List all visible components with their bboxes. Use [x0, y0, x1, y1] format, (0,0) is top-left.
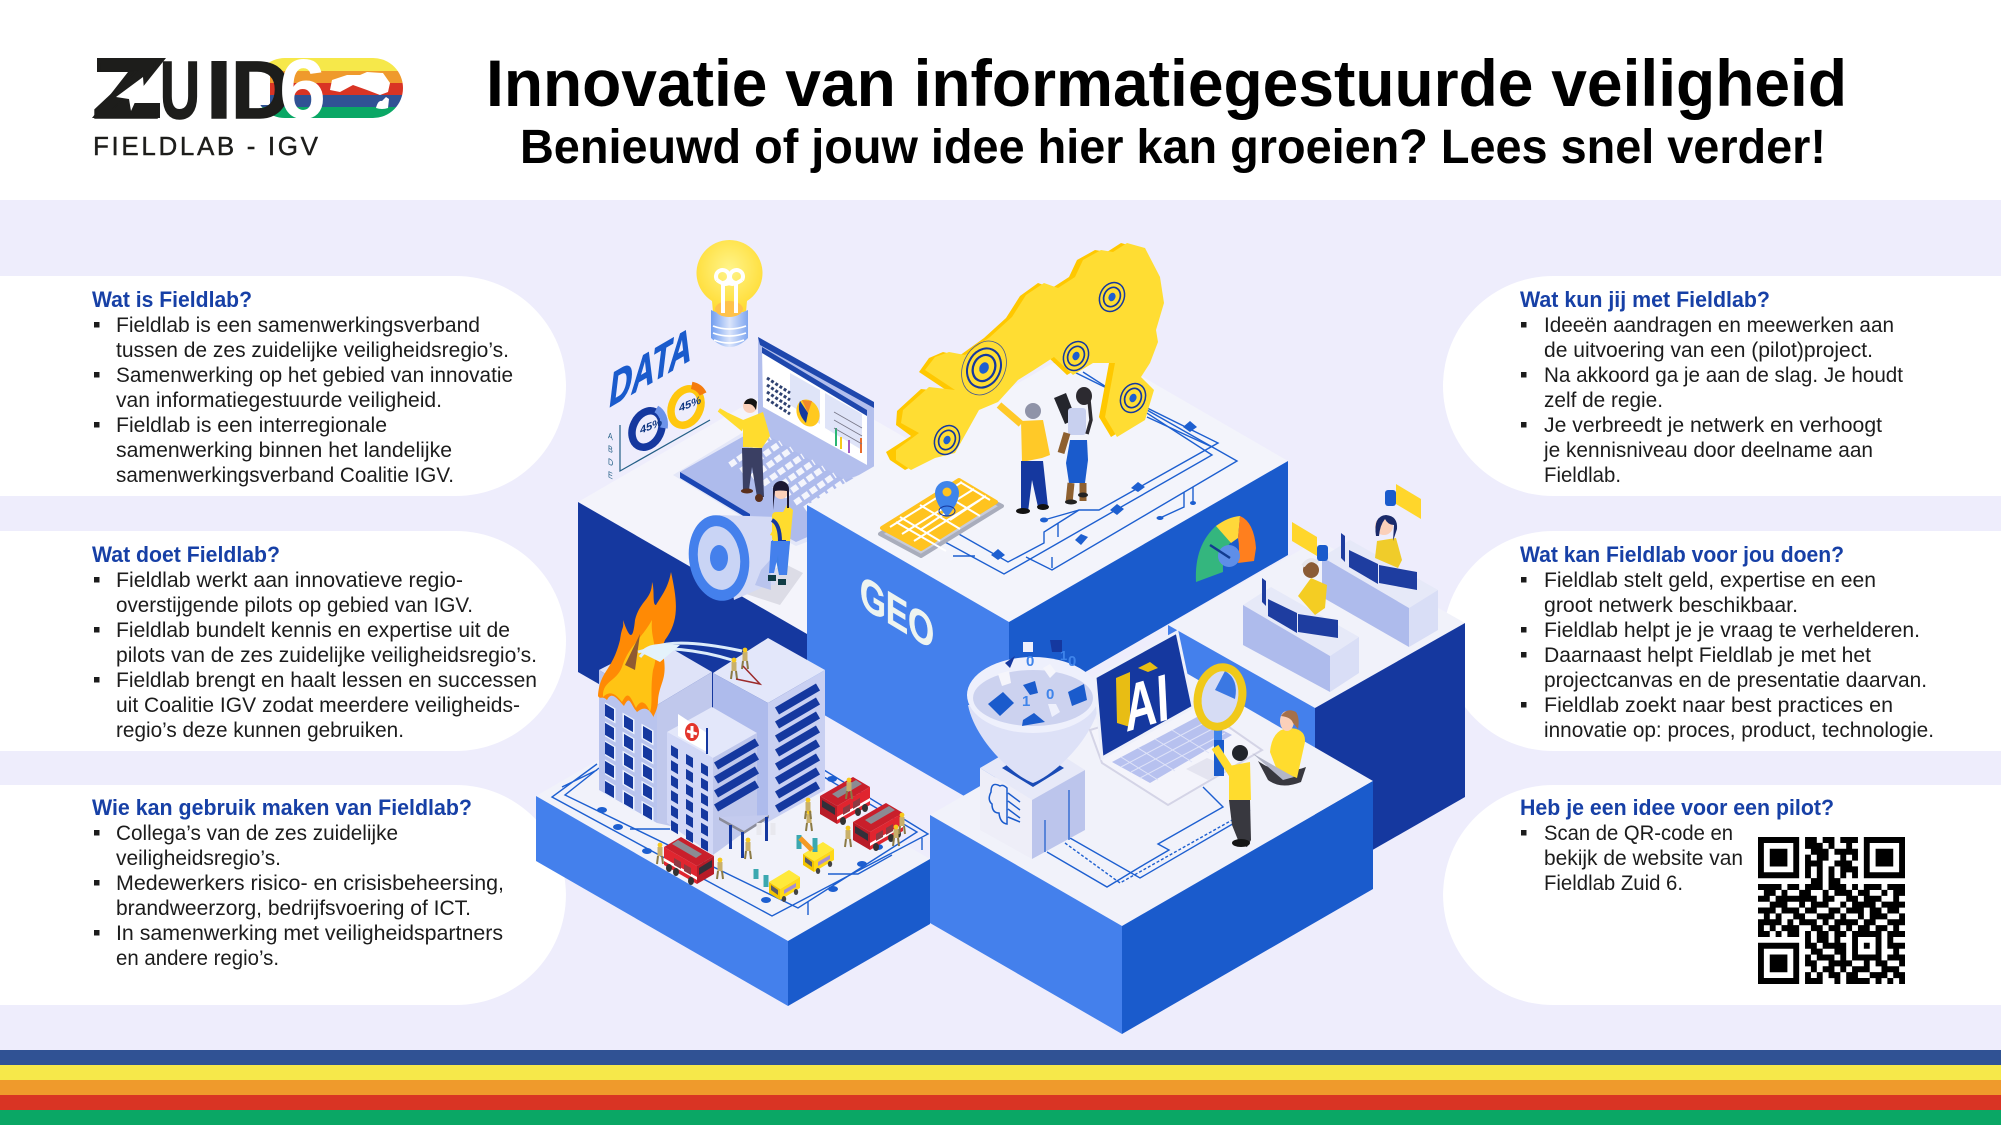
bullet list: innovatie op: proces, product, technologie.	[1544, 719, 1934, 742]
figure: man pointing	[719, 398, 770, 502]
colour stripes footer	[0, 1050, 2001, 1125]
bullet list: samenwerking binnen het landelijke	[116, 439, 452, 462]
panel: Wat is Fieldlab	[0, 276, 566, 496]
hospital sign	[678, 714, 708, 754]
bullet list: Fieldlab brengt en haalt lessen en successen	[116, 669, 537, 692]
panel: Wat kan Fieldlab voor jou doen	[1443, 531, 2001, 751]
GEO label: GEO	[860, 565, 934, 661]
bullet list	[1521, 569, 1934, 742]
block: GEO	[807, 243, 1288, 822]
data charts: E	[608, 469, 613, 482]
logo Z shape	[92, 58, 166, 118]
desk left	[1243, 578, 1359, 692]
fire trucks	[664, 777, 903, 885]
bullet list: pilots van de zes zuidelijke veiligheidsregio’s.	[116, 644, 537, 667]
hospital building	[599, 638, 825, 858]
logo wordmark: Z	[92, 45, 160, 136]
bullet list: Fieldlab zoekt naar best practices en	[1544, 694, 1893, 717]
panel: Wie kan gebruik maken van Fieldlab	[0, 785, 566, 1005]
bullet list: van informatiegestuurde veiligheid.	[116, 389, 442, 412]
entrance canopy	[719, 815, 769, 858]
bullet list	[1521, 314, 1903, 487]
panel: Wat kan Fieldlab voor jou doen: Wat kan Fieldlab voor jou doen?	[1520, 542, 1844, 567]
bullet list: projectcanvas en de presentatie daarvan.	[1544, 669, 1927, 692]
data charts	[608, 381, 710, 482]
bullet list: uit Coalitie IGV zodat meerdere veiligheids-	[116, 694, 520, 717]
bullet list: Fieldlab is een interregionale	[116, 414, 387, 437]
figure: woman with megaphone	[768, 481, 793, 582]
icon: flames	[598, 572, 676, 718]
icon: data funnel: 0	[1046, 686, 1054, 703]
logo D counter	[246, 71, 270, 105]
icon: data funnel: 1	[1022, 693, 1030, 710]
logo six: 6	[279, 42, 326, 136]
laptop	[673, 337, 874, 546]
logo subtitle: FIELDLAB - IGV	[93, 131, 319, 161]
bullet list: veiligheidsregio’s.	[116, 847, 281, 870]
Netherlands map	[886, 243, 1164, 470]
bullet list: Medewerkers risico- en crisisbeheersing,	[116, 872, 504, 895]
icon: data funnel: 0	[1026, 653, 1034, 670]
bullet list: Na akkoord ga je aan de slag. Je houdt	[1544, 364, 1903, 387]
firefighters on roof	[731, 648, 760, 684]
panel: Wat is Fieldlab: Wat is Fieldlab?	[92, 287, 252, 312]
bullet list: In samenwerking met veiligheidspartners	[116, 922, 503, 945]
logo paper plane	[116, 77, 145, 111]
front tower	[667, 707, 757, 855]
bullet list: Fieldlab bundelt kennis en expertise uit de	[116, 619, 510, 642]
bullet list: groot netwerk beschikbaar.	[1544, 594, 1798, 617]
logo colour pill	[260, 58, 403, 118]
circuit lines	[945, 362, 1237, 574]
data charts: 45%	[679, 395, 701, 415]
bullet list: Fieldlab.	[1544, 464, 1621, 487]
figure: woman with tablet	[1054, 387, 1092, 504]
laptop with AI: AI	[1123, 660, 1171, 747]
panel: Wat kun jij met Fieldlab	[1443, 276, 2001, 496]
laptop with AI	[1090, 632, 1262, 805]
speech bubbles	[1292, 484, 1421, 561]
icon: light bulb	[696, 240, 762, 347]
rear tower	[713, 638, 825, 825]
bullet list: Scan de QR-code en	[1544, 822, 1733, 845]
header: logo	[92, 58, 403, 156]
icon: data funnel: 0	[1068, 653, 1076, 670]
figure: man with yellow sweater	[999, 403, 1050, 514]
bullet list: overstijgende pilots op gebied van IGV.	[116, 594, 473, 617]
bullet list: bekijk de website van	[1544, 847, 1743, 870]
block: AI	[930, 632, 1373, 1034]
figure: operator right	[1375, 515, 1402, 568]
bullet list: Daarnaast helpt Fieldlab je met het	[1544, 644, 1871, 667]
bullet list: Fieldlab werkt aan innovatieve regio-	[116, 569, 463, 592]
panel: Wat doet Fieldlab: Wat doet Fieldlab?	[92, 542, 280, 567]
block: DATA	[578, 240, 1030, 804]
isometric illustration	[536, 240, 1465, 1034]
block: building	[536, 572, 930, 1006]
panel: Heb je een idee voor een pilot: Heb je een idee voor een pilot?	[1520, 795, 1834, 820]
bullet list: de uitvoering van een (pilot)project.	[1544, 339, 1873, 362]
icon: brain box	[980, 737, 1085, 859]
bullet list: Samenwerking op het gebied van innovatie	[116, 364, 513, 387]
bullet list: en andere regio’s.	[116, 947, 279, 970]
left tower	[599, 640, 712, 835]
bullet list: Collega’s van de zes zuidelijke	[116, 822, 398, 845]
icon: data funnel: 1	[1060, 648, 1067, 663]
bullet list	[94, 569, 537, 742]
bullet list: tussen de zes zuidelijke veiligheidsregio’s.	[116, 339, 509, 362]
icon: data funnel	[967, 640, 1099, 783]
bullet list: Fieldlab stelt geld, expertise en een	[1544, 569, 1876, 592]
data charts: 45%	[640, 417, 662, 437]
figure: man with magnifier	[1215, 745, 1251, 847]
data charts: D	[608, 456, 613, 469]
desk right	[1322, 533, 1438, 647]
icon: gauge	[1196, 516, 1256, 582]
bullet list	[1521, 822, 1743, 895]
map location rings	[930, 278, 1150, 459]
block: call centre	[1168, 484, 1465, 883]
bullet list: zelf de regie.	[1544, 389, 1663, 412]
bullet list	[94, 314, 513, 487]
bullet list: Fieldlab helpt je je vraag te verhelderen.	[1544, 619, 1920, 642]
bullet list: je kennisniveau door deelname aan	[1543, 439, 1873, 462]
logo wordmark: I	[206, 45, 232, 136]
bullet list: Fieldlab is een samenwerkingsverband	[116, 314, 480, 337]
icon: magnifying glass	[1192, 663, 1248, 776]
figure: woman with laptop	[1252, 710, 1306, 786]
bullet list: Je verbreedt je netwerk en verhoogt	[1544, 414, 1882, 437]
bullet list: Fieldlab Zuid 6.	[1544, 872, 1683, 895]
ambulances	[769, 842, 834, 902]
panel: Wat doet Fieldlab	[0, 531, 566, 751]
bullet list: samenwerkingsverband Coalitie IGV.	[116, 464, 454, 487]
circuit lines	[552, 763, 928, 916]
rescue workers	[657, 778, 905, 887]
data charts: A	[608, 430, 613, 443]
bullet list	[94, 822, 504, 970]
logo wordmark: D	[231, 45, 291, 136]
water spray	[638, 643, 742, 662]
panel: Wat kun jij met Fieldlab: Wat kun jij met Fieldlab?	[1520, 287, 1770, 312]
QR code	[1758, 840, 1905, 981]
DATA label: DATA	[607, 315, 695, 419]
page background	[0, 200, 2001, 1050]
circuit nodes	[991, 421, 1197, 560]
icon: map tile with pin	[880, 480, 1002, 556]
logo region map	[330, 72, 390, 109]
AI label	[1116, 672, 1130, 727]
keyboard keys	[730, 437, 845, 509]
icon: megaphone	[683, 511, 803, 605]
figure: operator left	[1298, 560, 1327, 615]
subtitle: Benieuwd of jouw idee hier kan groeien? Lees snel verder!	[520, 121, 1826, 174]
panel: Heb je een idee voor een pilot	[1443, 785, 2001, 1005]
data charts: B	[608, 443, 613, 456]
bullet list: Ideeën aandragen en meewerken aan	[1544, 314, 1894, 337]
bullet list: brandweerzorg, bedrijfsvoering of ICT.	[116, 897, 471, 920]
bullet list: regio’s deze kunnen gebruiken.	[116, 719, 404, 742]
title: Innovatie van informatiegestuurde veiligheid	[486, 46, 1847, 120]
panel: Wie kan gebruik maken van Fieldlab: Wie kan gebruik maken van Fieldlab?	[92, 795, 472, 820]
logo wordmark: U	[160, 45, 200, 136]
circuit lines	[1047, 787, 1250, 887]
